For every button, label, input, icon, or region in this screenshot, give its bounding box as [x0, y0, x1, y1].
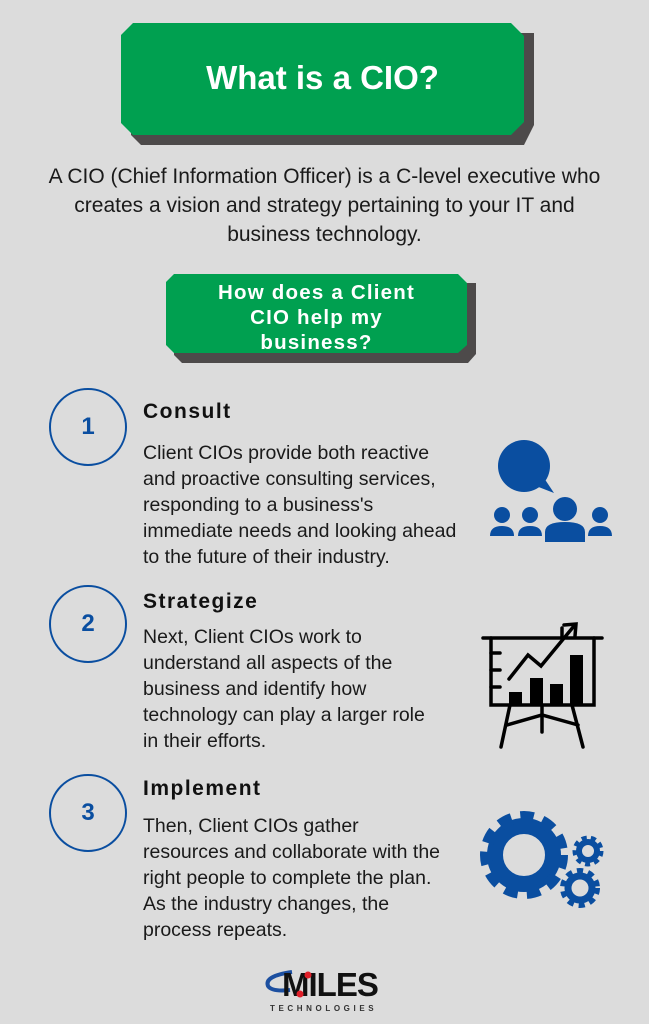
icon: people with speech bubble	[490, 440, 612, 542]
icon: presentation chart	[481, 622, 604, 749]
subtitle text: CIO help my	[250, 306, 383, 329]
number circle 1	[49, 388, 127, 466]
body text 1: Client CIOs provide both reactive	[143, 442, 429, 464]
intro paragraph: creates a vision and strategy pertaining to your IT and	[74, 194, 575, 217]
intro paragraph: A CIO (Chief Information Officer) is a C-level executive who	[49, 165, 600, 188]
intro paragraph	[48, 165, 600, 246]
body text 3: process repeats.	[143, 919, 287, 941]
heading: Strategize: Strategize	[143, 590, 258, 613]
intro paragraph: business technology.	[227, 223, 422, 246]
body text 2: understand all aspects of the	[143, 652, 392, 674]
heading: Implement: Implement	[143, 777, 262, 800]
body text 3	[143, 815, 440, 941]
body text 2	[143, 626, 425, 752]
title box	[121, 23, 534, 145]
heading: Consult: Consult	[143, 400, 232, 423]
step 1	[49, 388, 456, 568]
step 2	[49, 585, 425, 752]
body text 2: business and identify how	[143, 678, 366, 700]
body text 1	[143, 442, 456, 568]
number circle 1: 1	[81, 413, 95, 440]
body text 2: in their efforts.	[143, 730, 266, 752]
body text 1: to the future of their industry.	[143, 546, 390, 568]
body text 3: As the industry changes, the	[143, 893, 389, 915]
body text 3: Then, Client CIOs gather	[143, 815, 359, 837]
body text 1: immediate needs and looking ahead	[143, 520, 456, 542]
number circle 2	[49, 585, 127, 663]
number circle 2: 2	[81, 610, 95, 637]
body text 3: right people to complete the plan.	[143, 867, 431, 889]
logo: Miles Technologies	[266, 966, 378, 1013]
step 3	[49, 774, 440, 941]
subtitle text	[218, 281, 415, 354]
logo: Miles Technologies: MILES	[282, 966, 378, 1003]
number circle 3: 3	[81, 799, 95, 826]
subtitle box	[166, 274, 476, 363]
body text 2: technology can play a larger role	[143, 704, 425, 726]
body text 2: Next, Client CIOs work to	[143, 626, 362, 648]
title text: What is a CIO?	[206, 59, 439, 96]
subtitle text: How does a Client	[218, 281, 415, 304]
icon: gears	[480, 811, 604, 908]
number circle 3	[49, 774, 127, 852]
body text 3: resources and collaborate with the	[143, 841, 440, 863]
subtitle text: business?	[260, 331, 373, 354]
logo: Miles Technologies: TECHNOLOGIES	[270, 1004, 377, 1013]
body text 1: responding to a business's	[143, 494, 373, 516]
body text 1: and proactive consulting services,	[143, 468, 436, 490]
